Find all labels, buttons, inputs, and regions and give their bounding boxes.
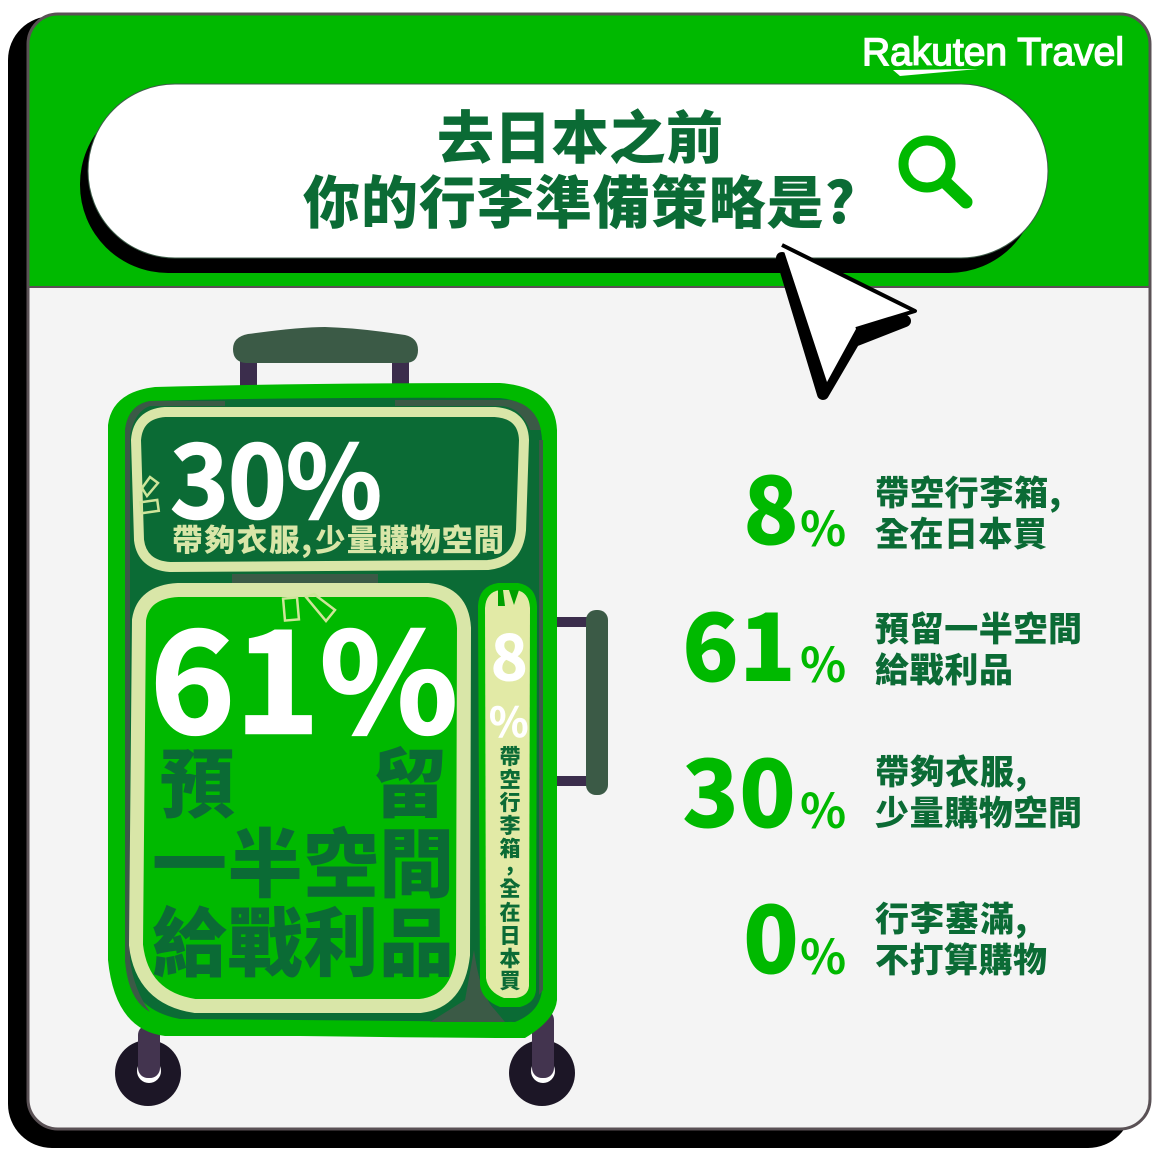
stat row: 61%: 給戰利品 xyxy=(875,643,1013,692)
label: 8 percent: 在 xyxy=(500,897,520,927)
label: 8 percent: 買 xyxy=(500,965,520,995)
stat: 61 percent: 61% xyxy=(150,573,458,773)
icon: zipper pulls xyxy=(283,594,335,621)
stat row: 61%: 61 xyxy=(682,575,796,708)
icon: zipper pulls xyxy=(498,590,519,606)
label: 61 percent: 留 xyxy=(372,724,447,833)
icon: cursor xyxy=(782,245,915,394)
stat row: 0% xyxy=(743,867,1047,1000)
stat row: 0%: % xyxy=(800,918,846,988)
stat row: 0%: 0 xyxy=(743,867,799,1000)
stat: 8 percent xyxy=(489,608,528,749)
label: 30 percent: 帶夠衣服, xyxy=(172,516,312,560)
stat row: 61%: 預留一半空間 xyxy=(875,602,1082,651)
logo: Rakuten Travel: Rakuten Travel xyxy=(862,31,1124,74)
label: 8 percent: 本 xyxy=(500,943,520,973)
stat row: 30%: 30 xyxy=(682,721,796,854)
stat row: 30%: 少量購物空間 xyxy=(875,786,1082,835)
stat: 30 percent: 30% xyxy=(170,402,382,547)
label: 61 percent: 預 xyxy=(160,724,235,833)
suitcase xyxy=(108,327,608,1106)
icon: zipper pulls xyxy=(140,477,159,513)
label: 8 percent: 李 xyxy=(500,810,520,840)
stat row: 61% xyxy=(682,575,1082,708)
stat row: 8% xyxy=(743,438,1061,571)
label: 8 percent xyxy=(500,741,520,995)
stat row: 61%: % xyxy=(800,626,846,696)
stat: 8 percent: 8 xyxy=(491,608,528,698)
stat: 8 percent: % xyxy=(489,689,528,749)
label: 8 percent: 帶 xyxy=(500,741,520,771)
suitcase: shell xyxy=(108,383,557,1038)
label: 8 percent: 行 xyxy=(500,787,520,817)
label: 8 percent: 全 xyxy=(500,873,520,903)
suitcase: inner xyxy=(125,398,542,1022)
label: 61 percent: 一半空間 xyxy=(152,804,454,913)
label: 8 percent: 日 xyxy=(500,920,520,950)
stat row: 0%: 不打算購物 xyxy=(875,933,1047,982)
stat row: 30% xyxy=(682,721,1082,854)
suitcase: wheels xyxy=(115,1010,575,1106)
stat row: 8%: 帶空行李箱, xyxy=(875,466,1061,515)
stat row: 8%: 全在日本買 xyxy=(875,507,1047,556)
label: 8 percent: 箱 xyxy=(500,833,520,863)
stat row: 30%: % xyxy=(800,772,846,842)
panel: 8% compartment xyxy=(478,583,537,1007)
label: 30 percent: 少量購物空間 xyxy=(315,516,504,560)
stat row: 30%: 帶夠衣服, xyxy=(875,745,1027,794)
label: 61 percent xyxy=(152,724,454,992)
stat row: 8%: 8 xyxy=(743,438,799,571)
panel: green header xyxy=(28,14,1150,287)
label: 30 percent xyxy=(172,516,504,560)
panel: 30% compartment xyxy=(136,402,524,567)
stat row: 8%: % xyxy=(800,490,846,560)
stat row: 0%: 行李塞滿, xyxy=(875,892,1027,941)
suitcase: top handle xyxy=(233,327,418,387)
title: 你的行李準備策略是? xyxy=(303,158,855,240)
label: 8 percent: 空 xyxy=(500,764,520,794)
panel: 61% compartment xyxy=(136,573,464,1006)
label: 8 percent: , xyxy=(506,848,514,878)
icon: magnifier xyxy=(904,140,966,202)
label: 61 percent: 給戰利品 xyxy=(152,883,454,992)
title: 去日本之前 xyxy=(437,93,723,175)
suitcase: side handle xyxy=(556,610,608,795)
title xyxy=(303,93,855,240)
search bar xyxy=(80,84,1048,273)
